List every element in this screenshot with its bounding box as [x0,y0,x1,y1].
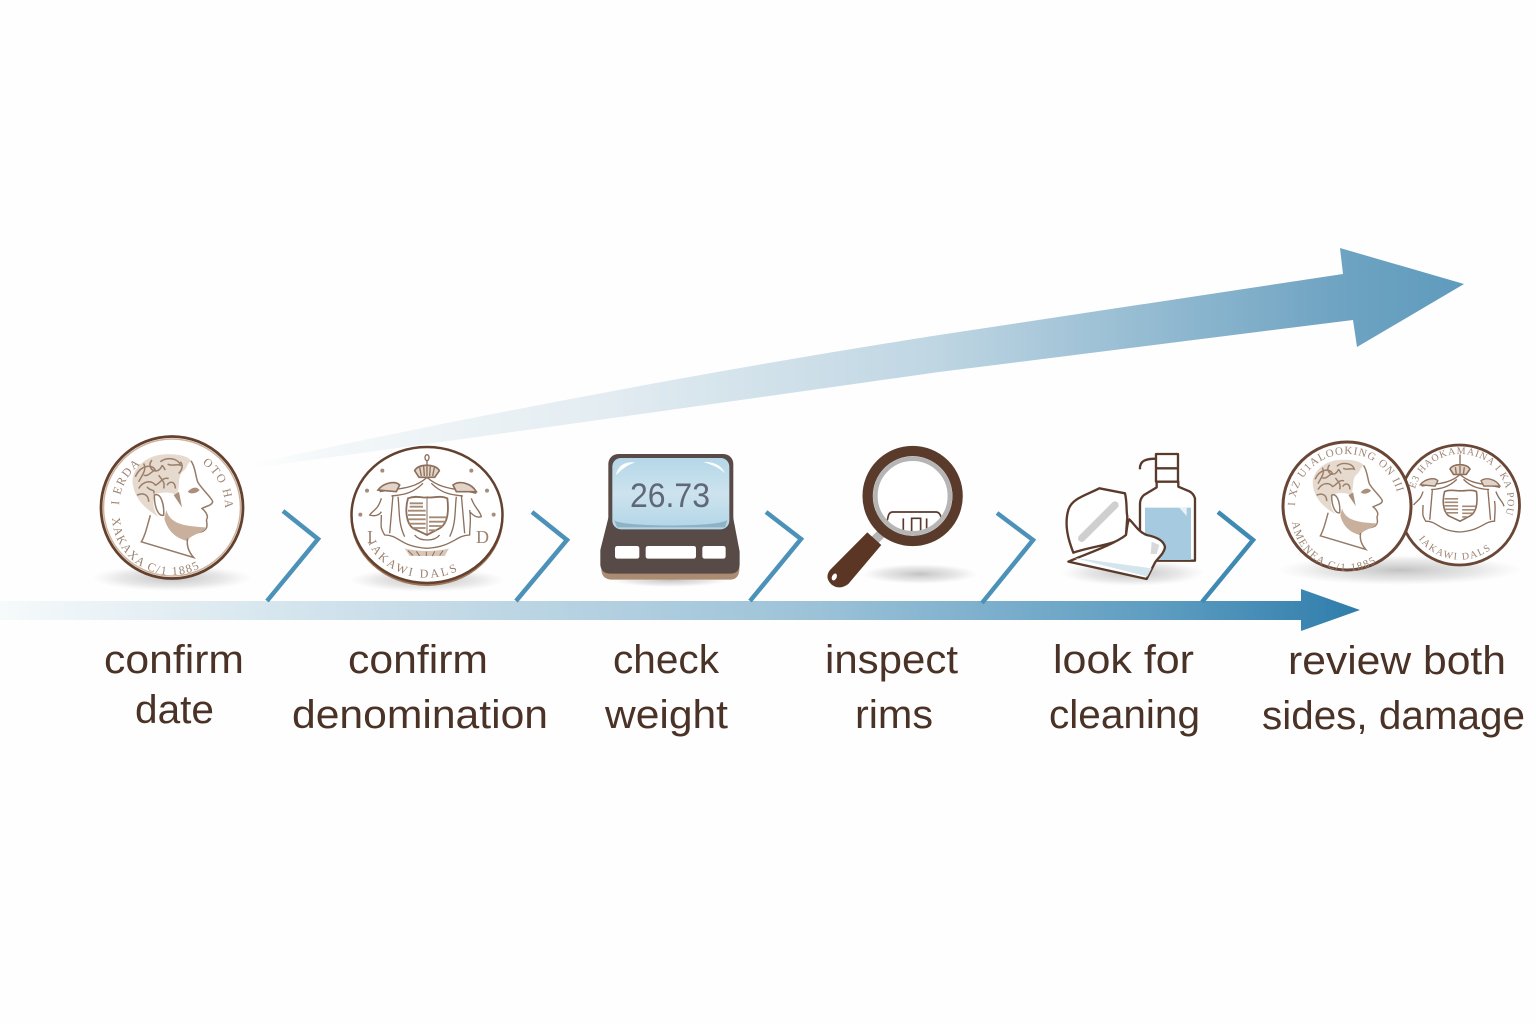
reverse side coin: E3 HAOKAMAINA I KA POU [1409,447,1514,516]
chevron 3 [750,512,801,601]
bottle [1140,454,1195,561]
label: inspect rims: inspect [825,638,958,682]
label: confirm date: confirm [104,638,244,682]
label: check weight: weight [604,693,728,737]
chevron 2 [516,512,567,601]
obverse side coin: I XZ U1ALOOKING ON III [1288,446,1404,506]
icon: coin with coat of arms, denomination: D [476,527,490,547]
infographic: coin inspection process [0,248,1524,738]
icon: coin with coat of arms, denomination [350,446,504,590]
upper growth arrow [232,248,1464,471]
icon: coin with portrait, date: XAKAXA C/1 1885 [112,518,198,575]
label: confirm denomination: denomination [292,693,548,737]
cloth [1067,488,1165,579]
icon: cloth and cleaning bottle [1061,454,1205,586]
obverse side coin: AMENEA C/1 1885 [1292,522,1375,571]
label: check weight: check [613,638,720,682]
reverse side coin: IAKAWI DALS [1418,535,1490,560]
chevron 5 [1202,512,1253,602]
icon: coin with coat of arms, denomination: IAKAWI DALS [368,540,456,578]
icon: digital scale reading 26.73: 26.73 [630,477,710,515]
label: confirm denomination: confirm [348,638,488,682]
label: review both sides, damage: sides, damage [1262,694,1525,738]
icon: magnifying glass over coin rim [827,451,978,587]
label: look for cleaning: look for [1053,638,1194,682]
icon: coin with portrait, date: I ERDA [111,461,140,505]
icon: coin with coat of arms, denomination: I [367,527,374,547]
chevron 4 [982,513,1033,603]
chevron 1 [267,511,318,601]
icon: coin with portrait, date [100,435,244,589]
label: inspect rims: rims [855,693,933,737]
label: review both sides, damage: review both [1288,639,1506,683]
lower timeline arrow [0,589,1360,631]
obverse side coin [1282,440,1412,572]
icon: digital scale reading 26.73 [600,454,740,587]
label: confirm date: date [135,688,214,732]
icon: both sides of the coin [1282,440,1521,582]
label: look for cleaning: cleaning [1049,693,1200,737]
reverse side coin [1405,444,1521,566]
